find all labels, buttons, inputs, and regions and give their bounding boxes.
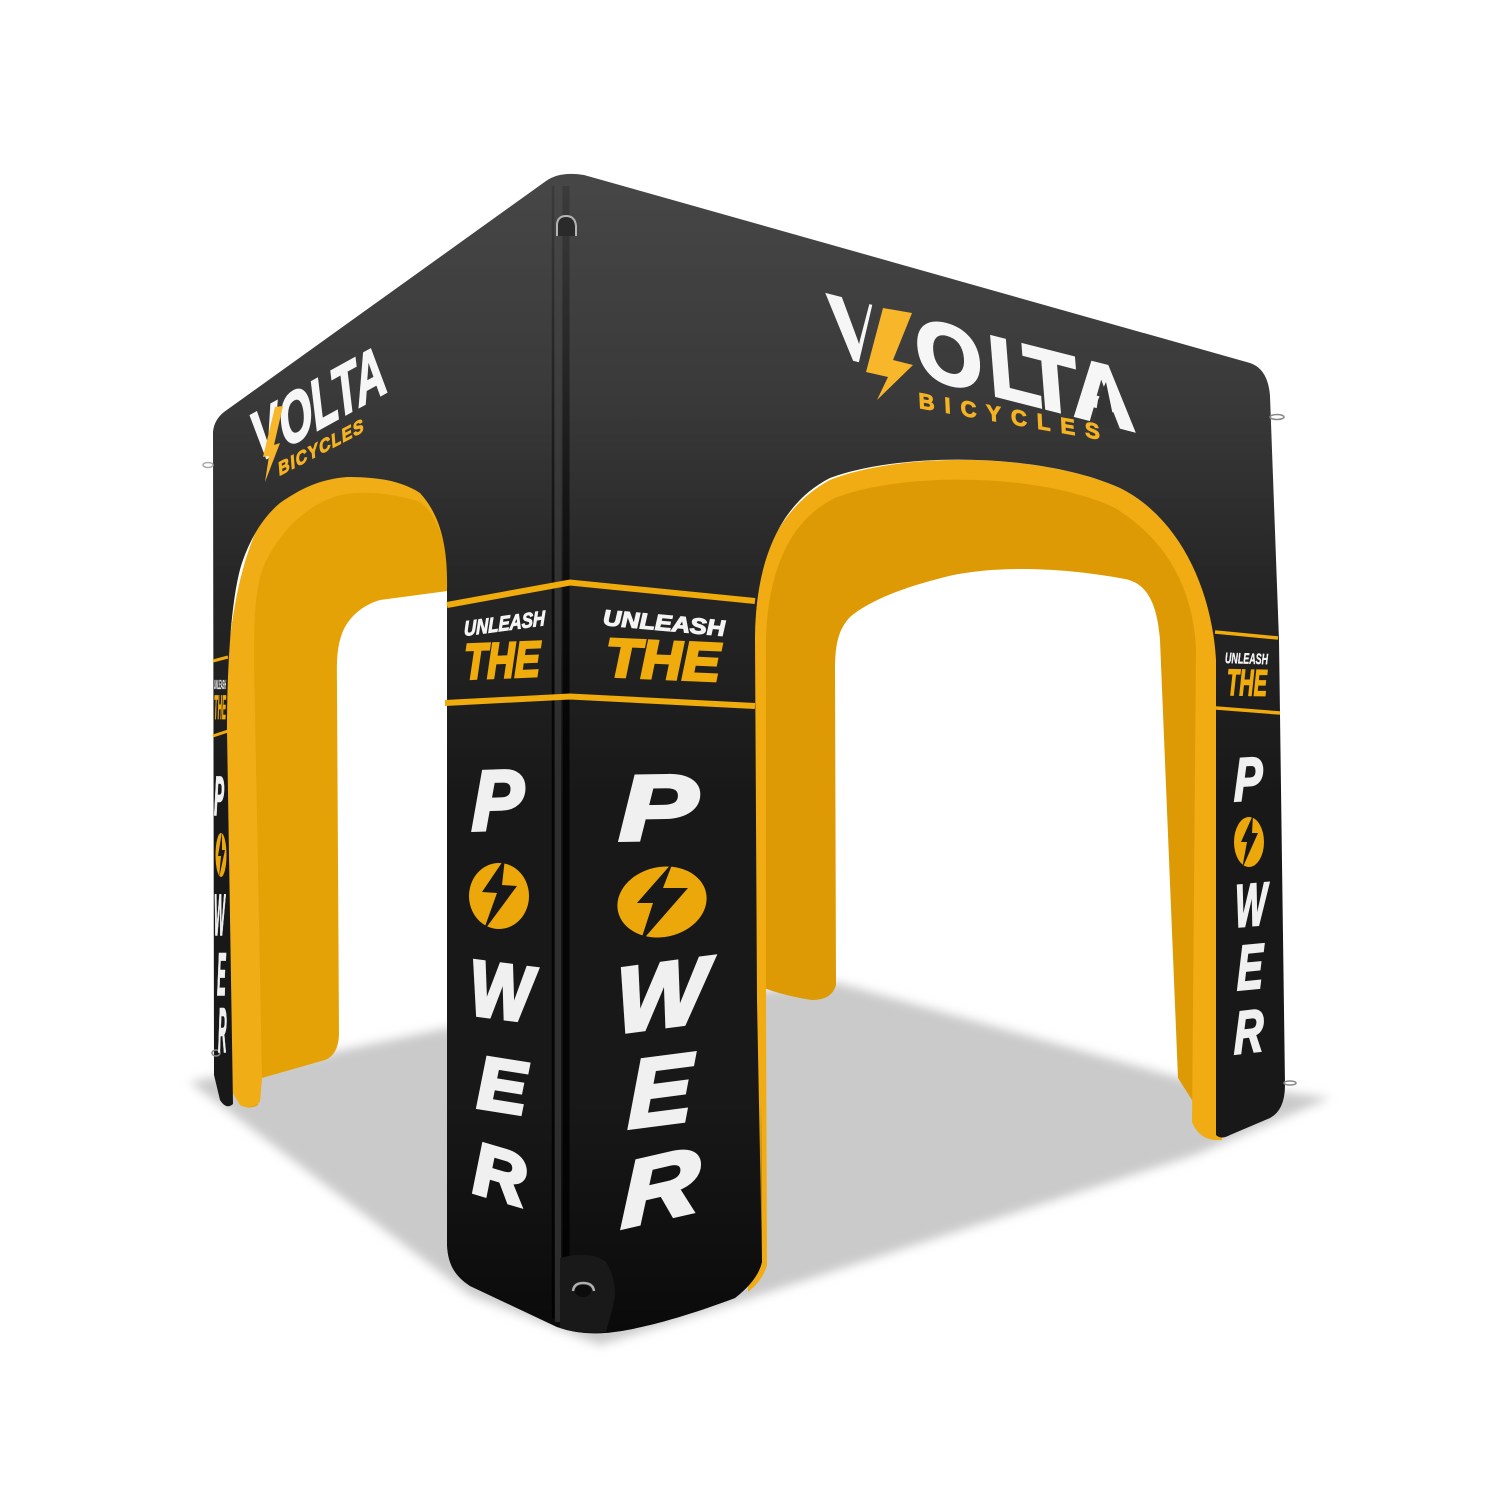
ground shadow (190, 982, 1330, 1345)
icon: bolt badge (1234, 815, 1264, 869)
letter E: E (1237, 931, 1265, 1004)
logo: front (825, 292, 1136, 440)
letter E: E (477, 1040, 529, 1131)
side loop left (203, 462, 213, 468)
power: front leg right (611, 756, 715, 1248)
letter R: R (621, 1127, 700, 1248)
letter W: W (214, 882, 226, 947)
letter W: W (1235, 871, 1270, 941)
letter P: P (619, 756, 698, 860)
band lines (213, 657, 228, 736)
text: UNLEASH (214, 677, 226, 692)
icon: bolt badge (216, 832, 226, 878)
letter W: W (616, 937, 715, 1053)
letter E: E (217, 943, 226, 1009)
top ring (557, 216, 576, 236)
logo wordmark letters: VOLTA (826, 278, 1137, 450)
leg foot shading (447, 1100, 762, 1333)
the left: THE (464, 631, 541, 690)
band text: front leg right (603, 605, 726, 693)
logo A counter (1094, 382, 1116, 430)
letter P: P (472, 753, 524, 849)
letter W: W (470, 944, 538, 1040)
power: front leg left (469, 753, 538, 1223)
unleash right: UNLEASH (603, 605, 726, 641)
letter E: E (628, 1034, 695, 1149)
letter R: R (1234, 996, 1263, 1067)
right arch (748, 460, 1222, 1292)
logo bolt left (263, 406, 283, 482)
logo bolt (866, 308, 913, 400)
left arch inner face (224, 471, 455, 1108)
letter P: P (1234, 745, 1263, 815)
canopy and leg fabric (213, 174, 1285, 1333)
logo wordmark left: VOLTA (248, 328, 389, 479)
unleash left: UNLEASH (464, 607, 546, 641)
icon: bolt badge right (611, 858, 713, 946)
right leg graphics (1215, 632, 1280, 1067)
letter P: P (214, 764, 224, 827)
letter R: R (218, 995, 227, 1066)
band lines: front leg (445, 582, 755, 706)
logo tagline left: BICYCLES (278, 415, 364, 480)
letter R: R (473, 1125, 525, 1223)
icon: bolt badge left (469, 858, 529, 932)
side loop right (1270, 414, 1284, 420)
the right: THE (606, 628, 722, 693)
unleash: UNLEASH (1225, 650, 1269, 668)
text: THE (214, 689, 226, 727)
logo tagline: BICYCLES (918, 388, 1100, 444)
band text: front leg left (464, 607, 546, 690)
logo: left side (248, 328, 389, 482)
tent (203, 174, 1296, 1333)
lower loop right (1284, 1081, 1296, 1085)
left arch front rim (224, 471, 455, 1107)
the: THE (1227, 662, 1268, 704)
band lines (1215, 632, 1280, 713)
left leg graphics (213, 657, 228, 1066)
lower loop left (212, 1050, 220, 1056)
right arch front rim (748, 460, 1222, 1292)
bottom ring patch (560, 1255, 615, 1333)
corner seam (553, 186, 566, 1326)
right arch inner face (752, 462, 1218, 1130)
left arch (224, 471, 455, 1108)
